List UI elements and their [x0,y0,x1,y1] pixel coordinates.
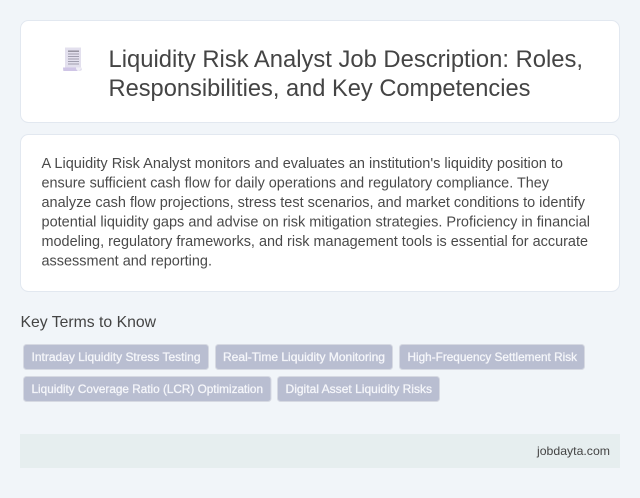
tag: digital asset liquidity risks [278,376,440,402]
tag: high-frequency settlement risk [400,344,584,370]
footer bar [20,434,620,468]
tag: real-time liquidity monitoring: Real-Time Liquidity Monitoring [223,350,385,364]
tag: high-frequency settlement risk: High-Frequency Settlement Risk [408,350,578,364]
heading: title: Responsibilities, and Key Competencies [108,75,530,102]
icon: document scroll [63,48,82,71]
heading: title: Liquidity Risk Analyst Job Description: Roles, [108,46,583,73]
panel: description card [20,134,620,292]
tag: intraday liquidity stress testing [24,344,208,370]
text block: description: modeling, regulatory frameworks, and risk management tools is essential for accurate [42,234,588,250]
text block: description: A Liquidity Risk Analyst monitors and evaluates an institution's liquidity position to [42,156,563,172]
tag: liquidity coverage ratio optimization: Liquidity Coverage Ratio (LCR) Optimization [32,382,263,396]
text block: description: assessment and reporting. [42,254,212,270]
tag: digital asset liquidity risks: Digital Asset Liquidity Risks [286,382,432,396]
panel: title card [20,20,620,122]
tag: liquidity coverage ratio optimization [24,376,271,402]
text block: description: ensure sufficient cash flow for daily operations and regulatory compliance. They [42,176,550,192]
text block: description: potential liquidity gaps and advise on risk mitigation strategies. Proficiency in financial [42,214,590,230]
heading: key terms: Key Terms to Know [20,314,156,331]
tag: real-time liquidity monitoring [216,344,392,370]
heading: title [108,46,583,102]
tag: intraday liquidity stress testing: Intraday Liquidity Stress Testing [32,350,200,364]
text block: description [42,156,590,270]
text block: description: analyze cash flow projections, stress test scenarios, and market conditions to identify [42,195,586,211]
footer bar: jobdayta.com [536,444,610,458]
